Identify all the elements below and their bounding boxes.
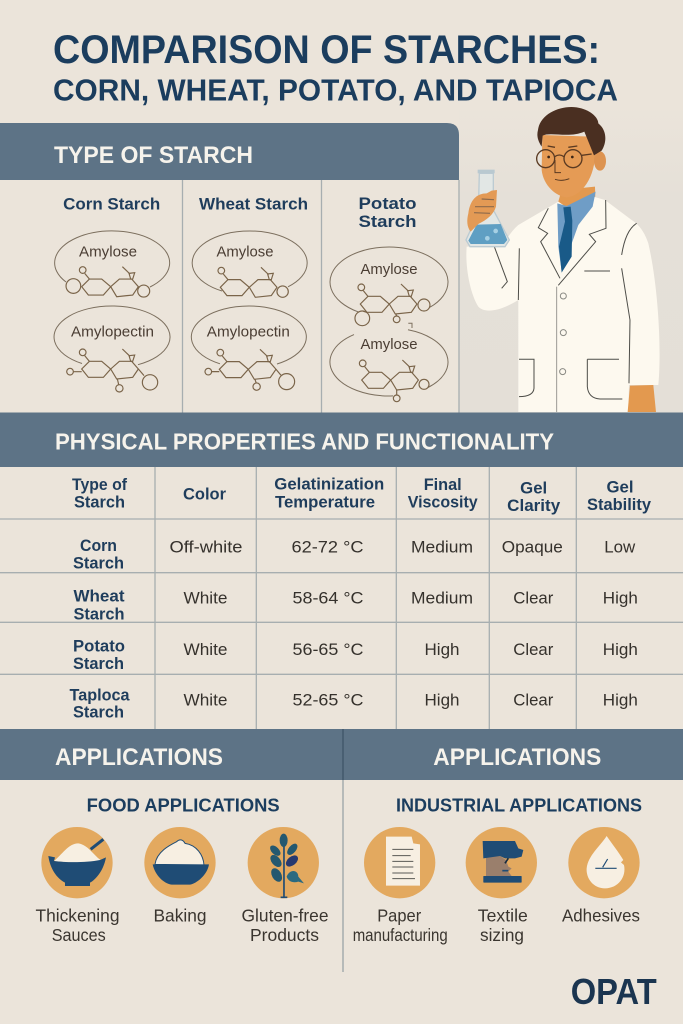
row: wheat starch: Wheat (74, 588, 125, 606)
icon: baking bowl (144, 827, 216, 898)
column: potato starch: Potato (358, 195, 416, 213)
row: tapioca starch: Starch (73, 704, 124, 722)
label: thickening sauces (36, 906, 120, 945)
heading: physical properties (0, 412, 683, 467)
icon: adhesive drop (568, 827, 640, 898)
column: corn starch: Corn Starch (63, 195, 160, 213)
column: corn starch (54, 195, 170, 392)
table header row (72, 475, 652, 515)
row: corn starch: Starch (73, 554, 124, 572)
tie (559, 207, 572, 273)
table header row: Color (183, 485, 227, 503)
title: CORN, WHEAT, POTATO, AND TAPIOCA (53, 72, 618, 108)
lapels (494, 200, 637, 412)
column: wheat starch: Amylose (216, 244, 274, 261)
label: thickening sauces: Sauces (52, 925, 106, 945)
row: corn starch: Low (604, 538, 636, 557)
label: paper manufacturing: Paper (377, 906, 421, 926)
row: wheat starch: Clear (513, 588, 554, 607)
column: potato starch: Amylose (360, 261, 418, 278)
row: tapioca starch: High (424, 690, 460, 709)
table header row: Gelatinization (274, 475, 384, 493)
head (542, 135, 595, 197)
row: potato starch: High (424, 640, 460, 659)
row: potato starch: Potato (73, 638, 125, 656)
row: potato starch: 56-65 °C (292, 640, 364, 659)
row: tapioca starch: 52-65 °C (292, 690, 364, 709)
label: textile sizing (478, 906, 528, 945)
row: tapioca starch (70, 687, 638, 722)
row: wheat starch (74, 588, 638, 623)
column: wheat starch (191, 195, 308, 390)
column: potato starch (330, 195, 448, 402)
heading band: applications: APPLICATIONS (55, 744, 223, 771)
row: potato starch: White (184, 640, 228, 659)
row: tapioca starch: High (603, 690, 638, 709)
neck (558, 187, 595, 207)
label: textile sizing: Textile (478, 906, 528, 926)
table header row: Starch (74, 494, 125, 512)
label: paper manufacturing: manufacturing (353, 925, 448, 945)
row: tapioca starch: Taploca (70, 687, 130, 705)
row: wheat starch: Starch (74, 605, 124, 623)
table header row: Gel (520, 479, 547, 497)
row: corn starch: Opaque (502, 538, 563, 557)
title (53, 28, 618, 108)
heading: type of starch (0, 123, 459, 180)
label: gluten-free products: Products (250, 925, 319, 945)
heading: food applications: FOOD APPLICATIONS (87, 796, 280, 816)
row: corn starch: Corn (80, 537, 117, 555)
label: thickening sauces: Thickening (36, 906, 120, 926)
left hand (467, 190, 497, 232)
table header row: Temperature (275, 493, 375, 511)
row: tapioca starch: Clear (513, 690, 554, 709)
label: gluten-free products: Gluten-free (242, 906, 328, 926)
logo: OPAT: OPAT (571, 971, 657, 1012)
panel: industrial applications (353, 796, 642, 945)
row: potato starch (73, 638, 638, 673)
row: corn starch (73, 537, 636, 572)
table header row: Type of (72, 476, 127, 494)
table header row: Final (424, 476, 462, 494)
label: textile sizing: sizing (480, 925, 524, 945)
lab coat (466, 197, 660, 412)
panel: type of starch (0, 123, 459, 413)
label: paper manufacturing (353, 906, 448, 945)
column: potato starch: Starch (358, 213, 416, 231)
row: corn starch: Off-white (170, 538, 242, 557)
panel: food applications (36, 796, 328, 945)
row: potato starch: Starch (73, 655, 124, 673)
title: COMPARISON OF STARCHES: (53, 28, 600, 72)
icon: gluten-free plant (248, 827, 319, 898)
table header row: Stability (587, 496, 652, 514)
heading band: applications: APPLICATIONS (433, 744, 601, 771)
row: potato starch: Clear (513, 640, 554, 659)
table header row: Viscosity (408, 494, 478, 512)
table: physical properties (0, 467, 683, 729)
row: wheat starch: White (184, 588, 228, 607)
shirt (557, 192, 596, 272)
column: wheat starch: Amylopectin (207, 324, 290, 341)
label: adhesives: Adhesives (562, 906, 640, 926)
heading: industrial applications: INDUSTRIAL APPLICATIONS (396, 796, 642, 816)
row: wheat starch: High (603, 588, 638, 607)
row: wheat starch: Medium (411, 588, 473, 607)
column: wheat starch: Wheat Starch (199, 195, 308, 213)
illustration: scientist holding a flask (466, 107, 660, 412)
row: wheat starch: 58-64 °C (292, 588, 364, 607)
hair (537, 107, 605, 155)
row: corn starch: Medium (411, 538, 473, 557)
row: tapioca starch: White (184, 690, 228, 709)
column: corn starch: Amylose (79, 244, 137, 261)
heading: physical properties: PHYSICAL PROPERTIES AND FUNCTIONALITY (55, 428, 554, 454)
icon: thickening bowl (41, 827, 113, 898)
column: corn starch: Amylopectin (71, 324, 154, 341)
row: potato starch: High (603, 640, 638, 659)
icon: paper (364, 827, 435, 898)
row: corn starch: 62-72 °C (292, 538, 364, 557)
table header row: Gel (606, 479, 634, 497)
glasses and face details (537, 146, 592, 180)
right hand (628, 385, 656, 412)
label: baking: Baking (154, 906, 206, 926)
icon: textile machine (466, 827, 537, 898)
column: potato starch: Amylose (360, 336, 418, 353)
heading band: applications (0, 729, 683, 780)
flask (466, 170, 509, 247)
label: gluten-free products (242, 906, 328, 945)
heading: type of starch: TYPE OF STARCH (54, 142, 253, 169)
table header row: Clarity (507, 497, 561, 515)
